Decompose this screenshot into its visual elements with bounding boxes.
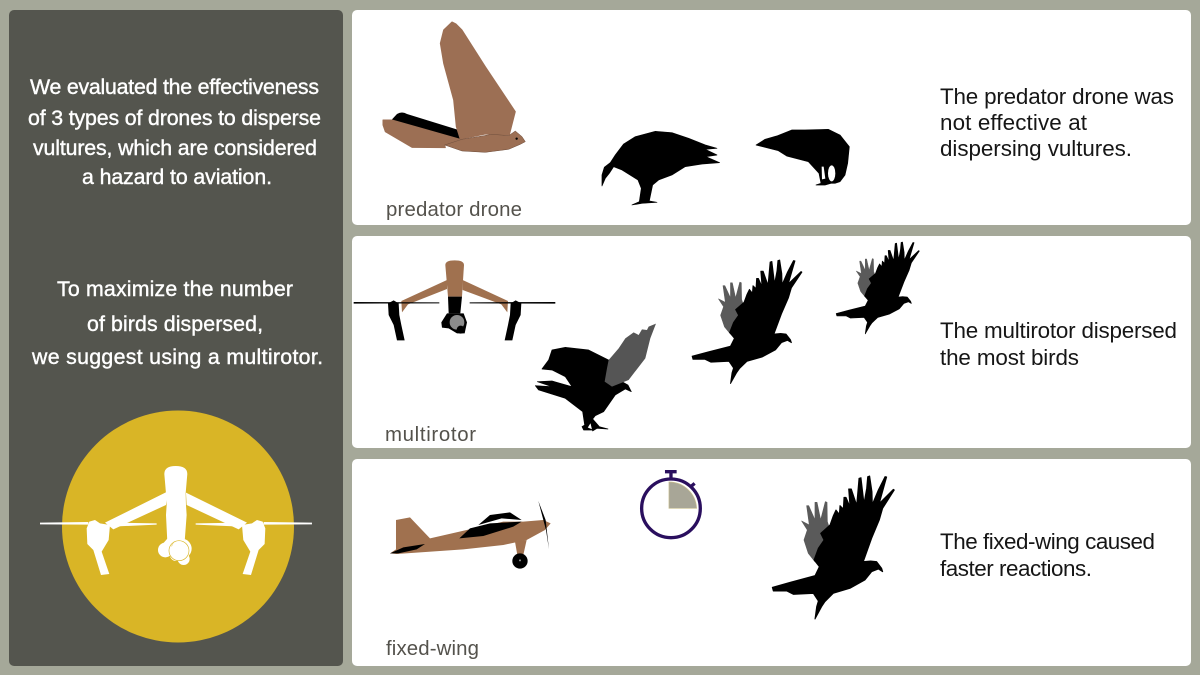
panel: predator drone [352, 10, 1191, 225]
text: predator finding: not effective at [940, 110, 1088, 135]
text block: recommendation [31, 277, 323, 369]
text block: study aim: a hazard to aviation. [82, 165, 272, 189]
icon: predator bird drone [383, 22, 525, 152]
label: predator drone: predator drone [386, 199, 522, 221]
label: fixed-wing: fixed-wing [386, 638, 479, 660]
panel: fixed-wing [352, 459, 1191, 666]
icon: vulture pecking [756, 129, 849, 185]
icon: fixed-wing plane [390, 501, 551, 569]
text: multirotor finding [940, 318, 1177, 370]
icon: vulture flying large [692, 260, 802, 384]
text block: recommendation: of birds dispersed, [87, 312, 263, 336]
text block: recommendation: we suggest using a multirotor. [31, 345, 323, 369]
icon: multirotor drone [354, 260, 555, 340]
label: multirotor: multirotor [385, 424, 476, 446]
text: multirotor finding: the most birds [940, 345, 1079, 370]
icon: vulture flying [772, 476, 894, 619]
text block: study aim: We evaluated the effectiveness [30, 75, 319, 99]
text: predator finding: The predator drone was [940, 84, 1174, 109]
text block: study aim: vultures, which are considered [33, 136, 317, 160]
icon: vulture standing [602, 131, 720, 205]
icon: vulture taking off [535, 324, 656, 431]
text: fixed-wing finding [940, 529, 1155, 581]
text block: recommendation: To maximize the number [57, 277, 293, 301]
panel: summary [9, 10, 343, 666]
panel: multirotor [352, 236, 1191, 448]
icon: stopwatch [642, 472, 700, 538]
text block: study aim [28, 75, 321, 189]
text: multirotor finding: The multirotor dispersed [940, 318, 1177, 343]
text block: study aim: of 3 types of drones to disperse [28, 106, 321, 130]
text: fixed-wing finding: faster reactions. [940, 556, 1092, 581]
text: predator finding: dispersing vultures. [940, 136, 1132, 161]
icon: white multirotor [40, 466, 312, 575]
icon: gold circle [62, 410, 294, 642]
text: predator finding [940, 84, 1174, 161]
text: fixed-wing finding: The fixed-wing caused [940, 529, 1155, 554]
icon: vulture flying small [836, 242, 919, 334]
